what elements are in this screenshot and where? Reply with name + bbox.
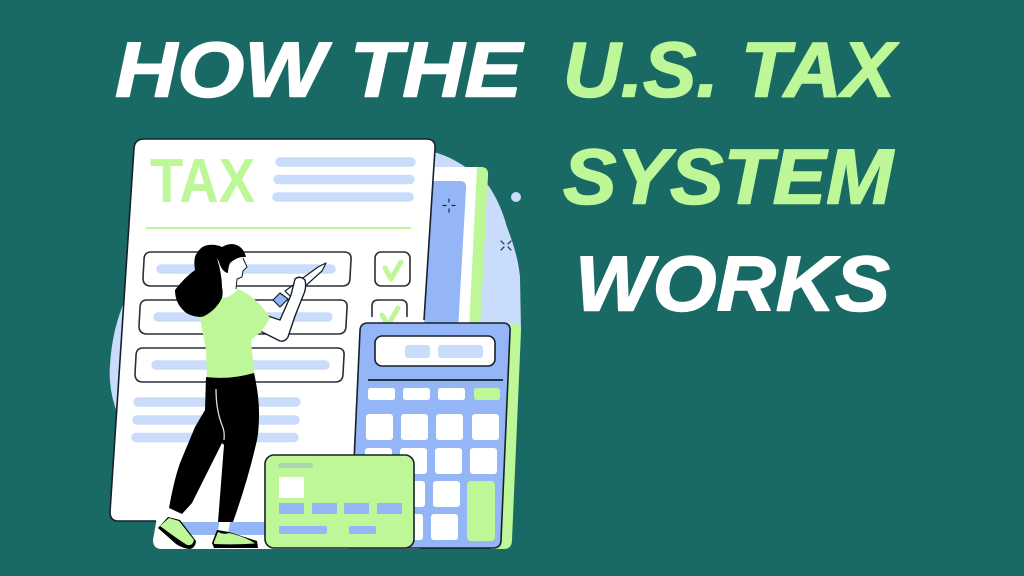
pen: [273, 263, 326, 307]
title: HOW THE: [115, 26, 524, 114]
checkbox 2: [372, 300, 407, 325]
illustration: tax paperwork: [110, 139, 521, 549]
neck and face: [220, 250, 247, 298]
title: WORKS: [575, 240, 890, 328]
trouser seam: [216, 389, 224, 440]
left shoe: [158, 517, 196, 549]
title: SYSTEM: [563, 132, 895, 220]
hair: [175, 244, 246, 317]
form row 3: [135, 348, 344, 382]
tax form sheet: [110, 139, 435, 521]
calculator keys: [365, 388, 500, 541]
right shoe: [212, 530, 258, 548]
woman figure: [158, 244, 326, 549]
sparkle: on blob: [501, 241, 511, 250]
credit card: [265, 455, 414, 548]
heading lines: [277, 162, 411, 197]
back sheet: [420, 167, 488, 330]
form row 2: [139, 300, 347, 334]
trousers: [169, 373, 259, 522]
calculator screen: [375, 336, 495, 366]
form heading: TAX: TAX: [150, 147, 255, 216]
lower sheet: [153, 500, 420, 549]
dot accent: [511, 192, 521, 202]
sparkle: on blue sheet: [443, 199, 455, 212]
face outline: [236, 258, 247, 289]
lower text lines: [136, 402, 296, 438]
checkbox 1: [375, 252, 410, 286]
title: U.S. TAX: [563, 26, 899, 114]
raised arm and hand: [258, 277, 306, 341]
form row 1: [143, 252, 351, 286]
calculator: [350, 323, 521, 549]
shirt: [200, 289, 270, 378]
background blob: [110, 150, 521, 420]
socks: [170, 512, 230, 533]
green divider: [146, 227, 411, 229]
title: [115, 26, 899, 328]
